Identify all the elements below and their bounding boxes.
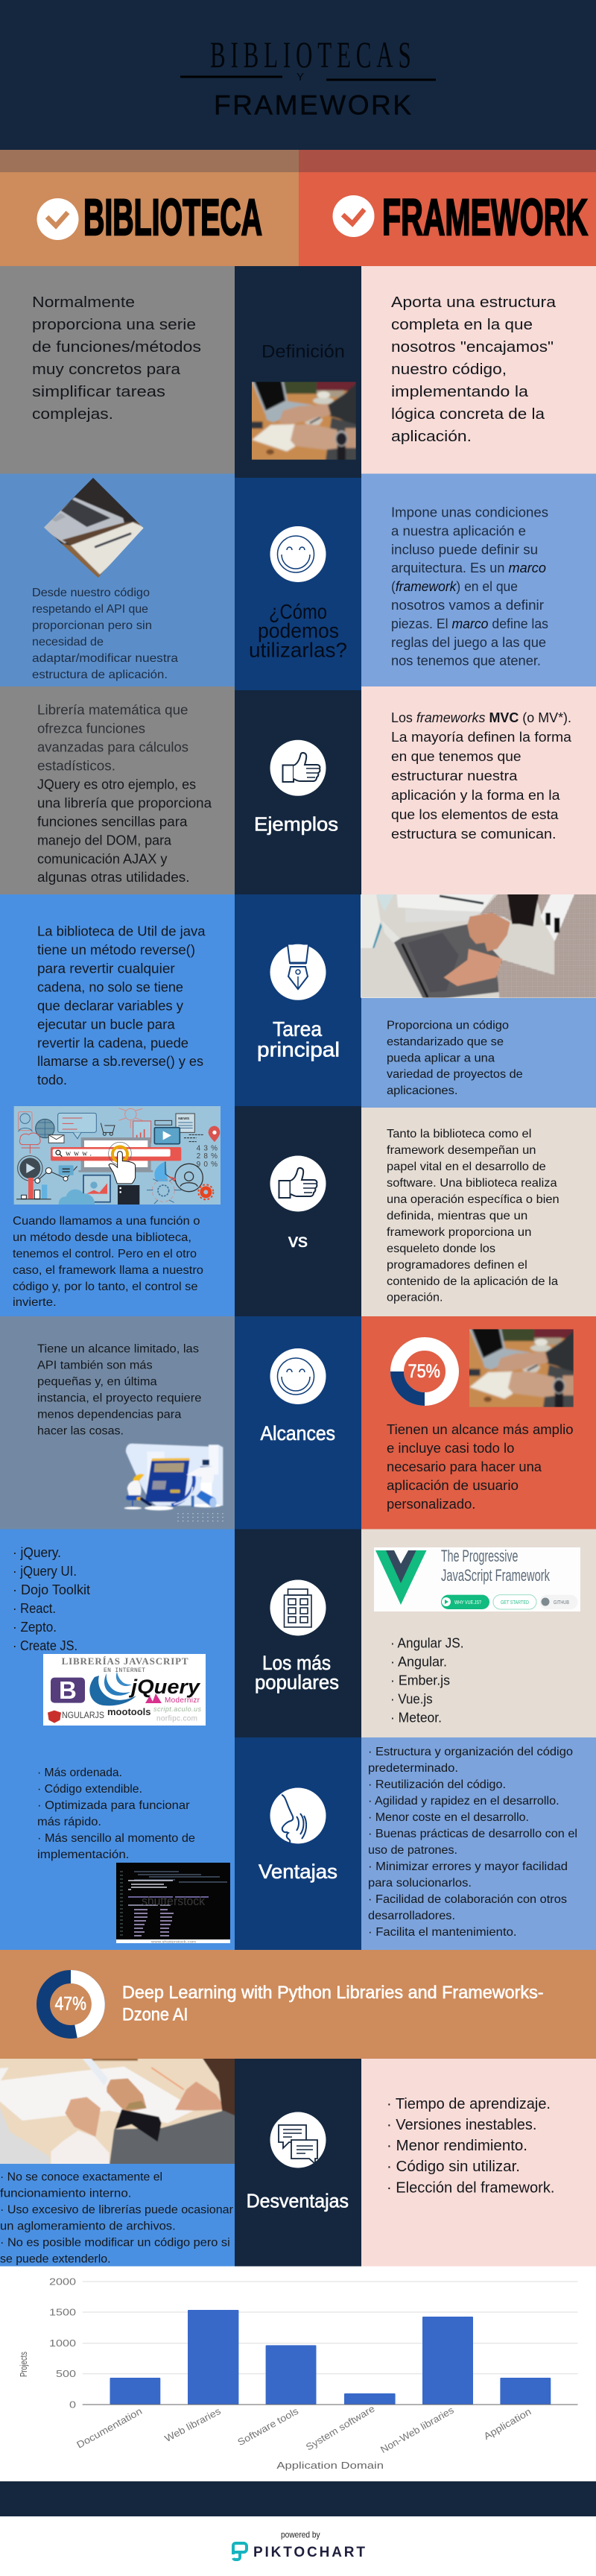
panel: tarea principal framework: variedad de proyectos de	[387, 1068, 523, 1081]
image: source code screenshot: shutterstock	[142, 1894, 205, 1908]
panel: ejemplos biblioteca: estadísticos.	[37, 759, 115, 774]
image: source code screenshot: www.shutterstock.com	[151, 1939, 196, 1943]
panel: desventajas central	[235, 2059, 361, 2266]
text: tarea principal biblioteca: cadena, no solo se tiene	[37, 979, 183, 994]
panel: definicion biblioteca: complejas.	[32, 406, 113, 423]
title	[180, 34, 436, 121]
panel: ventajas framework	[361, 1737, 596, 1950]
panel: vs framework: programadores definen el	[387, 1259, 527, 1272]
panel: como utilizarlas central: ¿Cómo	[269, 600, 327, 623]
x axis labels: System software	[304, 2403, 377, 2453]
footer bar	[0, 2481, 596, 2516]
panel: ventajas framework: desarrolladores.	[368, 1910, 455, 1922]
list: bibliotecas populares: · jQuery UI.	[13, 1564, 77, 1579]
text: control invertido: un método desde una biblioteca,	[13, 1231, 191, 1244]
panel: vs framework	[361, 1108, 596, 1316]
image: vue.js banner: GET STARTED	[501, 1600, 529, 1606]
bar chart: projects by application domain: Application Domain	[276, 2460, 384, 2471]
panel: definicion framework: lógica concreta de la	[391, 406, 545, 423]
panel: desventajas biblioteca: funcionamiento interno.	[0, 2188, 131, 2200]
panel: desventajas biblioteca	[0, 2164, 235, 2266]
panel: como utilizarlas framework: nosotros vamos a definir	[391, 598, 544, 613]
illustration: web search graphic: NEWS	[178, 1117, 190, 1121]
panel: como utilizarlas framework: nos tenemos que atener.	[391, 653, 541, 668]
panel: desventajas biblioteca: · Uso excesivo de librerías puede ocasionar	[0, 2204, 234, 2217]
icon: building	[270, 1580, 326, 1635]
panel: vs central	[235, 1106, 361, 1316]
panel: ejemplos biblioteca: una librería que proporciona	[37, 796, 212, 811]
text: tarea principal biblioteca	[37, 924, 206, 1087]
panel: populares framework: · Angular.	[390, 1655, 447, 1670]
panel: como utilizarlas central	[235, 478, 361, 690]
panel: alcances framework: necesario para hacer una	[387, 1459, 542, 1474]
panel: ejemplos biblioteca: ofrezca funciones	[37, 722, 145, 736]
panel: como utilizarlas framework: piezas. El marco define las	[391, 616, 548, 631]
panel: desventajas biblioteca: · No se conoce exactamente el	[0, 2171, 162, 2184]
image: javascript library logos: mootools	[107, 1706, 150, 1717]
image: source code screenshot	[116, 1863, 230, 1943]
image: vue.js banner: The Progressive	[441, 1547, 518, 1565]
panel: ejemplos framework: aplicación y la forma en la	[391, 788, 561, 803]
panel: definicion biblioteca: Normalmente	[32, 294, 135, 311]
panel: populares framework: · Meteor.	[390, 1710, 442, 1725]
panel: ventajas framework: · Facilidad de colaboración con otros	[368, 1893, 567, 1906]
panel: deep learning banner: Deep Learning with Python Libraries and Frameworks-	[122, 1983, 544, 2003]
text: tarea principal biblioteca: que declarar variables y	[37, 999, 183, 1014]
panel: ejemplos framework: en que tenemos que	[391, 749, 522, 764]
page header background	[0, 0, 596, 150]
panel: alcances framework	[361, 1316, 596, 1530]
photo: hands writing	[467, 1327, 577, 1409]
panel: como utilizarlas framework: reglas del juego a las que	[391, 635, 546, 650]
panel: como utilizarlas biblioteca: Desde nuestro código	[32, 587, 150, 599]
illustration: web search graphic: 90%	[197, 1161, 218, 1169]
panel: vs framework: Tanto la biblioteca como el	[387, 1128, 531, 1140]
bars	[110, 2310, 551, 2405]
panel: ventajas framework: · Minimizar errores y mayor facilidad	[368, 1860, 568, 1873]
panel: alcances framework: aplicación de usuario	[387, 1478, 519, 1493]
panel: vs framework: una operación específica o bien	[387, 1193, 559, 1206]
list: bibliotecas populares	[13, 1545, 90, 1653]
panel: como utilizarlas framework	[361, 474, 596, 686]
text: tarea principal biblioteca: para revertir cualquier	[37, 962, 175, 976]
icon: thumbs up	[270, 1155, 326, 1212]
panel: ventajas framework: uso de patrones.	[368, 1844, 457, 1857]
panel: ventajas framework: · Buenas prácticas de desarrollo con el	[368, 1828, 577, 1840]
panel: definicion biblioteca: muy concretos para	[32, 362, 181, 378]
panel: alcances biblioteca: instancia, el proyecto requiere	[37, 1392, 202, 1405]
panel: ejemplos biblioteca: manejo del DOM, para	[37, 833, 172, 848]
panel: definicion biblioteca	[0, 266, 235, 474]
panel: ventajas framework: · Menor coste en el desarrollo.	[368, 1811, 529, 1824]
panel: tarea principal central: principal	[257, 1038, 340, 1061]
panel: ventajas framework: · Estructura y organización del código	[368, 1746, 573, 1758]
panel: definicion framework: nosotros "encajamos"	[391, 339, 554, 356]
photo: laptop diamond	[44, 478, 143, 578]
panel: ejemplos framework: La mayoría definen la forma	[391, 730, 572, 745]
panel: ejemplos biblioteca	[0, 686, 235, 894]
chart: 75 percent donut	[397, 1344, 452, 1399]
panel: alcances framework: personalizado.	[387, 1497, 475, 1512]
panel: vs framework: software. Una biblioteca realiza	[387, 1177, 557, 1190]
panel: como utilizarlas biblioteca: necesidad de	[32, 636, 104, 648]
panel: vs framework: papel vital en el desarrollo de	[387, 1161, 546, 1173]
title: Y	[297, 71, 304, 83]
image: javascript library logos: B	[59, 1676, 77, 1704]
panel: definicion biblioteca: simplificar tareas	[32, 384, 165, 400]
panel: como utilizarlas central: utilizarlas?	[249, 638, 347, 662]
panel: populares framework	[361, 1530, 596, 1737]
icon: piktochart logo	[233, 2543, 247, 2560]
panel: vs framework: framework desempeñan un	[387, 1144, 536, 1157]
panel: como utilizarlas biblioteca	[0, 473, 235, 686]
y axis labels: 1500	[49, 2306, 76, 2318]
panel: ejemplos central	[235, 690, 361, 894]
panel: deep learning banner	[0, 1950, 596, 2059]
footer: powered by piktochart: powered by	[281, 2530, 320, 2540]
panel: alcances framework: Tienen un alcance más amplio	[387, 1422, 574, 1437]
chart: 75 percent donut: 75%	[408, 1361, 440, 1382]
panel: definicion framework: completa en la que	[391, 317, 533, 333]
footer: powered by piktochart: PIKTOCHART	[253, 2545, 365, 2560]
photo: woman typing on laptop	[358, 892, 596, 1000]
list: ventajas biblioteca: más rápido.	[37, 1816, 101, 1828]
panel: tarea principal y vs biblioteca (fondo azul)	[0, 894, 235, 1316]
panel: ejemplos framework: estructura se comunican.	[391, 827, 556, 842]
image: javascript library logos: EN INTERNET	[104, 1667, 145, 1674]
list: ventajas biblioteca: · Optimizada para funcionar	[37, 1799, 190, 1812]
panel: desventajas framework: · Código sin utilizar.	[387, 2159, 520, 2175]
panel: vs framework: operación.	[387, 1292, 443, 1304]
text: tarea principal biblioteca: llamarse a sb.reverse() y es	[37, 1054, 203, 1069]
text: tarea principal biblioteca: ejecutar un bucle para	[37, 1017, 176, 1032]
y axis labels: 0	[69, 2399, 76, 2411]
panel: tarea principal framework: pueda aplicar a una	[387, 1052, 495, 1064]
x axis labels: Web libraries	[162, 2405, 223, 2444]
list: bibliotecas populares: · Dojo Toolkit	[13, 1582, 90, 1597]
text: tarea principal biblioteca: tiene un método reverse()	[37, 942, 195, 957]
panel: vs framework: framework proporciona un	[387, 1226, 531, 1239]
y axis labels: 2000	[49, 2276, 76, 2287]
panel: ejemplos biblioteca: avanzadas para cálculos	[37, 739, 188, 754]
text: control invertido: Cuando llamamos a una función o	[13, 1215, 200, 1228]
text: tarea principal biblioteca: La biblioteca de Util de java	[37, 924, 206, 939]
panel: como utilizarlas biblioteca: adaptar/modificar nuestra	[32, 652, 178, 665]
panel: vs framework: contenido de la aplicación de la	[387, 1275, 558, 1288]
list: ventajas biblioteca: · Código extendible.	[37, 1783, 142, 1796]
x axis labels	[74, 2403, 533, 2455]
panel: ventajas framework: · Agilidad y rapidez en el desarrollo.	[368, 1795, 559, 1808]
panel: ventajas central: Ventajas	[259, 1860, 337, 1883]
panel: definicion framework	[361, 266, 596, 474]
panel: desventajas framework: · Elección del framework.	[387, 2179, 554, 2196]
panel: ventajas framework: · Reutilización del código.	[368, 1778, 506, 1791]
panel: desventajas framework: · Tiempo de aprendizaje.	[387, 2096, 551, 2112]
text: control invertido	[13, 1215, 203, 1309]
panel: ventajas framework: predeterminado.	[368, 1762, 458, 1775]
footer: powered by piktochart	[0, 2516, 596, 2576]
text: tarea principal biblioteca: todo.	[37, 1073, 67, 1087]
panel: tarea principal framework: aplicaciones.	[387, 1085, 457, 1097]
panel: ventajas framework: para solucionarlos.	[368, 1877, 472, 1890]
panel: biblioteca header	[0, 172, 299, 266]
panel: vs central: vs	[288, 1231, 308, 1251]
image: javascript library logos: norfipc.com	[156, 1715, 197, 1723]
panel: alcances biblioteca: menos dependencias para	[37, 1409, 182, 1421]
panel: desventajas framework: · Menor rendimiento.	[387, 2138, 527, 2154]
panel: ventajas central	[235, 1737, 361, 1950]
image: javascript library logos: jQuery	[129, 1676, 201, 1698]
panel: populares framework: · Angular JS.	[390, 1636, 463, 1651]
list: bibliotecas populares: · jQuery.	[13, 1545, 61, 1560]
panel: alcances biblioteca: API también son más	[37, 1360, 153, 1372]
x axis labels: Software tools	[235, 2405, 301, 2448]
panel: definicion framework: aplicación.	[391, 429, 472, 445]
panel: alcances biblioteca	[0, 1316, 235, 1530]
panel: tarea principal framework: estandarizado que se	[387, 1036, 504, 1048]
chart: 47 percent donut: 47%	[55, 1994, 86, 2015]
list: ventajas biblioteca: · Más sencillo al momento de	[37, 1832, 195, 1845]
icon: smile	[270, 526, 326, 582]
bar chart: projects by application domain: Projects	[18, 2352, 29, 2377]
text: control invertido: invierte.	[13, 1296, 57, 1309]
panel: definicion framework: nuestro código,	[391, 362, 507, 378]
panel: definicion framework: Aporta una estructura	[391, 294, 557, 311]
list: ventajas biblioteca: · Más ordenada.	[37, 1767, 122, 1779]
illustration: web search graphic: 28%	[197, 1152, 218, 1161]
panel: ejemplos framework	[361, 686, 596, 894]
y axis labels	[49, 2276, 76, 2411]
panel: populares framework: · Ember.js	[390, 1673, 450, 1688]
panel: vs framework: esqueleto donde los	[387, 1243, 495, 1255]
illustration: dashboard with people	[124, 1444, 224, 1521]
panel: tarea principal central: Tarea	[273, 1017, 322, 1041]
image: vue.js banner: GITHUB	[554, 1600, 569, 1606]
panel: vs framework: definida, mientras que un	[387, 1210, 527, 1222]
icon: fountain pen	[270, 944, 326, 1000]
image: javascript library logos: Modernizr	[165, 1696, 200, 1705]
panel: desventajas framework: · Versiones inestables.	[387, 2117, 536, 2133]
x axis labels: Documentation	[74, 2405, 144, 2451]
panel: definicion central: Definición	[261, 341, 345, 362]
icon: speaking profile	[270, 1787, 326, 1845]
photo: people reviewing documents	[0, 2056, 238, 2167]
illustration: web search graphic: 43%	[197, 1144, 218, 1152]
panel: desventajas biblioteca: · No es posible modificar un código pero si	[0, 2237, 230, 2250]
y axis labels: 1000	[49, 2337, 76, 2349]
panel: ventajas framework: · Facilita el mantenimiento.	[368, 1926, 517, 1939]
x axis labels: Application	[481, 2406, 533, 2442]
panel: como utilizarlas biblioteca: estructura de aplicación.	[32, 669, 168, 681]
list: ventajas biblioteca: implementación.	[37, 1849, 130, 1861]
panel: ejemplos central: Ejemplos	[254, 812, 338, 835]
panel: definicion biblioteca: de funciones/métodos	[32, 339, 201, 356]
x axis labels: Non-Web libraries	[378, 2404, 456, 2455]
panel: deep learning banner: Dzone AI	[122, 2005, 188, 2025]
panel: populares central: Los más	[262, 1652, 331, 1674]
panel: tarea principal central	[235, 894, 361, 1106]
panel: desventajas biblioteca: se puede extenderlo.	[0, 2253, 110, 2266]
list: bibliotecas populares: · React.	[13, 1601, 56, 1616]
panel: desventajas biblioteca: un aglomeramiento de archivos.	[0, 2220, 176, 2233]
panel: como utilizarlas framework: incluso puede definir su	[391, 543, 538, 558]
panel: ejemplos framework: estructurar nuestra	[391, 768, 519, 783]
bar chart: projects by application domain	[0, 2266, 596, 2481]
image: javascript library logos: NGULARJS	[62, 1710, 104, 1720]
text: control invertido: código y, por lo tanto, el control se	[13, 1281, 198, 1293]
panel: definicion central	[235, 266, 361, 478]
panel: alcances central	[235, 1316, 361, 1530]
panel: definicion biblioteca: proporciona una serie	[32, 317, 196, 333]
panel: alcances biblioteca: pequeñas y, en última	[37, 1376, 157, 1389]
image: javascript library logos	[43, 1654, 206, 1726]
panel: framework header	[299, 172, 596, 266]
image: vue.js banner	[374, 1547, 580, 1611]
panel: como utilizarlas framework: Impone unas condiciones	[391, 505, 548, 520]
icon: thumbs up	[270, 740, 326, 796]
list: bibliotecas populares: · Create JS.	[13, 1638, 77, 1653]
list: ventajas biblioteca	[37, 1767, 195, 1861]
panel: alcances framework: e incluye casi todo lo	[387, 1441, 514, 1456]
panel: ejemplos framework: que los elementos de esta	[391, 807, 559, 822]
list: bibliotecas populares: · Zepto.	[13, 1620, 57, 1635]
panel: alcances biblioteca: hacer las cosas.	[37, 1425, 124, 1438]
panel: ejemplos biblioteca: algunas otras utilidades.	[37, 870, 189, 885]
illustration: web search graphic	[14, 1106, 221, 1205]
title: FRAMEWORK	[214, 89, 411, 121]
text: control invertido: tenemos el control. Pero en el otro	[13, 1248, 197, 1260]
chart: 47 percent donut	[43, 1977, 98, 2032]
panel: como utilizarlas biblioteca: proporcionan pero sin	[32, 619, 152, 632]
panel: populares central: populares	[255, 1671, 339, 1693]
panel: biblioteca header: BIBLIOTECA	[83, 189, 262, 246]
panel: como utilizarlas framework: a nuestra aplicación e	[391, 523, 526, 538]
panel: ejemplos biblioteca: comunicación AJAX y	[37, 851, 167, 866]
panel: como utilizarlas framework: arquitectura. Es un marco	[391, 561, 546, 575]
panel: alcances central: Alcances	[261, 1422, 335, 1445]
illustration: web search graphic: www.	[66, 1150, 92, 1158]
image: javascript library logos: script.aculo.us	[153, 1705, 201, 1713]
y axis labels: 500	[56, 2368, 76, 2379]
panel: tarea principal framework: Proporciona un código	[387, 1020, 509, 1032]
panel: desventajas central: Desventajas	[247, 2190, 349, 2212]
panel: ejemplos biblioteca: funciones sencillas para	[37, 814, 188, 829]
panel: como utilizarlas framework: (framework) en el que	[391, 579, 518, 594]
band above column headers	[0, 150, 596, 172]
panel: desventajas framework	[361, 2059, 596, 2266]
panel: ejemplos framework: Los frameworks MVC (o MV*).	[391, 710, 571, 725]
panel: populares y ventajas biblioteca (fondo azul)	[0, 1530, 235, 1950]
panel: tarea principal framework	[361, 998, 596, 1108]
image: vue.js banner: WHY VUE.JS?	[454, 1600, 481, 1606]
panel: alcances biblioteca: Tiene un alcance limitado, las	[37, 1343, 199, 1356]
panel: populares framework: · Vue.js	[390, 1692, 433, 1707]
panel: ejemplos biblioteca: JQuery es otro ejemplo, es	[37, 777, 196, 792]
panel: ejemplos biblioteca: Librería matemática que	[37, 702, 188, 717]
text: control invertido: caso, el framework llama a nuestro	[13, 1264, 203, 1277]
icon: smile	[270, 1348, 326, 1404]
image: javascript library logos: LIBRERÍAS JAVASCRIPT	[62, 1655, 188, 1667]
title: BIBLIOTECAS	[210, 34, 411, 75]
panel: definicion framework: implementando la	[391, 384, 529, 400]
panel: como utilizarlas central: podemos	[258, 619, 339, 643]
icon: chat bubbles	[270, 2112, 326, 2168]
panel: populares central	[235, 1530, 361, 1737]
panel: como utilizarlas biblioteca: respetando el API que	[32, 603, 148, 616]
text: tarea principal biblioteca: revertir la cadena, puede	[37, 1036, 188, 1051]
